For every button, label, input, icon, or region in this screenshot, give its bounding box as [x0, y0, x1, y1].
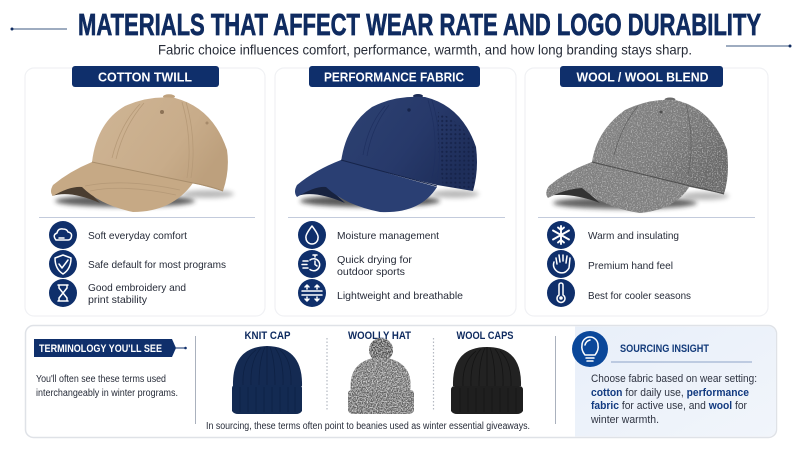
heading: performance fabric: PERFORMANCE FABRIC: [324, 70, 464, 84]
icon: hourglass: [49, 279, 77, 307]
sourcing caption: In sourcing, these terms often point to beanies used as winter essential giveaways.: [206, 421, 530, 432]
insight text: winter warmth.: [590, 414, 659, 426]
feature: premium hand feel: [547, 250, 673, 278]
icon: cloud: [49, 221, 77, 249]
image: gray wool cap: [546, 98, 729, 213]
heading: cotton twill: [72, 66, 219, 87]
feature: safe default: [49, 250, 226, 278]
heading: cotton twill: COTTON TWILL: [98, 70, 192, 84]
terminology text: [36, 374, 178, 399]
terminology tag: [34, 339, 187, 357]
feature: cooler seasons: Best for cooler seasons: [588, 290, 691, 302]
panel: performance fabric: [275, 66, 516, 316]
terminology text: interchangeably in winter programs.: [36, 388, 178, 399]
terminology tag: TERMINOLOGY YOU'LL SEE: [39, 343, 162, 355]
insight text: fabric for active use, and wool for: [591, 400, 747, 412]
subtitle: Fabric choice influences comfort, performance, warmth, and how long branding stays sharp.: [158, 42, 692, 58]
feature: embroidery stability: print stability: [88, 294, 148, 306]
feature: quick drying: Quick drying for: [337, 254, 413, 266]
heading: sourcing insight: SOURCING INSIGHT: [620, 343, 709, 355]
feature: lightweight: Lightweight and breathable: [337, 290, 463, 302]
icon: thermometer: [547, 279, 575, 307]
feature: moisture management: [298, 221, 439, 249]
icon: light bulb: [572, 331, 608, 367]
feature: embroidery stability: Good embroidery and: [88, 282, 186, 294]
beanie: knit cap: [232, 330, 302, 414]
insight text: [590, 373, 757, 426]
beanie: wool caps: WOOL CAPS: [456, 330, 514, 342]
feature: safe default: Safe default for most programs: [88, 259, 226, 271]
icon: stopwatch: [298, 250, 326, 278]
icon: breathable arrows: [298, 279, 326, 307]
feature: premium hand feel: Premium hand feel: [588, 260, 673, 272]
heading: wool blend: WOOL / WOOL BLEND: [576, 70, 708, 84]
icon: shield: [49, 250, 77, 278]
feature: warm and insulating: Warm and insulating: [588, 230, 679, 242]
panel: sourcing insight: [572, 326, 776, 436]
heading: performance fabric: [309, 66, 480, 87]
heading: wool blend: [560, 66, 723, 87]
insight text: cotton for daily use, performance: [591, 387, 749, 399]
feature: cooler seasons: [547, 279, 691, 307]
insight text: Choose fabric based on wear setting:: [591, 373, 757, 385]
left title accent line: [10, 28, 67, 30]
icon: hand: [547, 250, 575, 278]
feature: embroidery stability: [49, 279, 186, 307]
right title accent line: [726, 44, 792, 48]
feature: moisture management: Moisture management: [337, 230, 439, 242]
beanie: wool caps: [451, 330, 523, 414]
panel: cotton twill: [25, 66, 265, 316]
image: navy perforated cap: [295, 94, 479, 212]
beanie: woolly hat: WOOLLY HAT: [348, 330, 411, 342]
feature: lightweight: [298, 279, 463, 307]
icon: snowflake: [547, 221, 575, 249]
image: tan baseball cap: [51, 94, 234, 212]
feature: warm and insulating: [547, 221, 679, 249]
feature: quick drying: outdoor sports: [337, 266, 405, 278]
panel: wool blend: [525, 66, 768, 316]
icon: water drop: [298, 221, 326, 249]
terminology text: You'll often see these terms used: [36, 374, 166, 385]
panel: terminology and insight band: [26, 326, 776, 438]
feature: soft everyday comfort: Soft everyday comfort: [88, 230, 187, 242]
beanie: knit cap: KNIT CAP: [244, 330, 290, 342]
beanie: woolly hat: [348, 330, 414, 414]
feature: soft everyday comfort: [49, 221, 187, 249]
feature: quick drying: [298, 250, 413, 278]
